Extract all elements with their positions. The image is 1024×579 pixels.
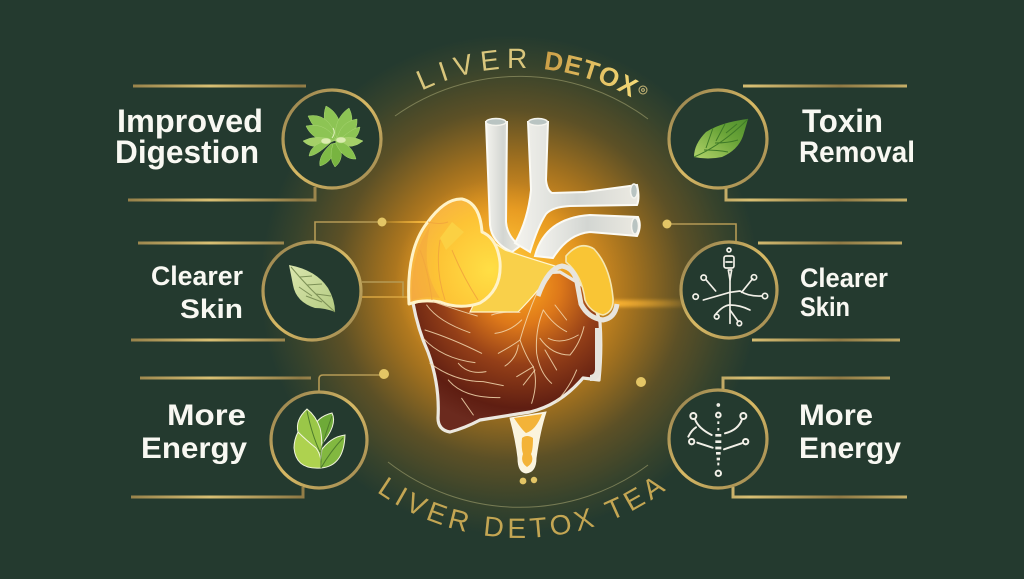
label: Clearer (151, 261, 243, 291)
frame lines (723, 378, 907, 497)
circle (669, 390, 767, 488)
label: Clearer (800, 263, 888, 293)
label: Removal (799, 136, 915, 169)
label (151, 261, 243, 324)
white vessels (486, 122, 640, 258)
orbit ring arcs (388, 76, 648, 507)
title word: Detox: DETOX (545, 52, 639, 98)
lobe veins (420, 222, 478, 300)
label (799, 103, 915, 169)
bottom dots (520, 477, 537, 484)
bottom caption: Liver Detox Tea: LIVER DETOX TEA (378, 477, 666, 538)
label: More (167, 399, 246, 432)
label: More (799, 399, 873, 432)
drip fill (514, 414, 542, 467)
label: Energy (141, 432, 247, 465)
label: Skin (180, 294, 243, 324)
yellow fold (440, 222, 464, 250)
frame lines (131, 243, 285, 340)
label (141, 399, 247, 465)
central lobe (470, 232, 555, 312)
veins (423, 293, 584, 415)
light flare right of liver (612, 300, 697, 307)
frame lines (131, 378, 311, 497)
panel: Clearer Skin left (131, 242, 361, 340)
label: Skin (800, 292, 850, 322)
icon: green leaves (294, 409, 345, 468)
label (799, 399, 901, 465)
circle (669, 90, 767, 188)
registered mark (639, 86, 647, 94)
frame lines (128, 86, 315, 200)
right small lobe (566, 246, 613, 315)
icon: green leaf (694, 119, 748, 158)
icon: pale leaf (289, 265, 335, 312)
drip duct (510, 412, 546, 473)
panel: Toxin Removal (669, 86, 915, 200)
core glow (395, 180, 595, 380)
title word: Liver: LIVER (416, 48, 526, 90)
circle (681, 242, 777, 338)
panel: Improved Digestion (115, 86, 381, 200)
icon: branching diagram (688, 404, 748, 476)
circle (263, 242, 361, 340)
central radial glow (260, 35, 760, 535)
icon: green plant (303, 106, 363, 167)
left yellow lobe (409, 199, 500, 306)
liver illustration (395, 118, 640, 473)
label: Improved (117, 103, 263, 139)
label: Toxin (802, 103, 883, 139)
label: Digestion (115, 134, 259, 170)
circle (271, 392, 367, 488)
liver lower body (413, 272, 601, 432)
label: Energy (799, 432, 901, 465)
title: Liver Detox (416, 48, 648, 98)
white rim, right side (590, 328, 598, 378)
panel: More Energy left (131, 378, 367, 497)
panel: Clearer Skin right (681, 242, 902, 340)
vessel openings (486, 118, 638, 234)
label (115, 103, 263, 170)
frame lines (752, 243, 902, 340)
icon: nerve diagram (693, 248, 768, 326)
frame lines (726, 86, 907, 200)
lobe orange shade (412, 226, 440, 300)
label (800, 263, 888, 322)
circle (283, 90, 381, 188)
panel: More Energy right (669, 378, 907, 497)
curved white band (538, 266, 617, 320)
connector lines to liver (315, 218, 736, 391)
